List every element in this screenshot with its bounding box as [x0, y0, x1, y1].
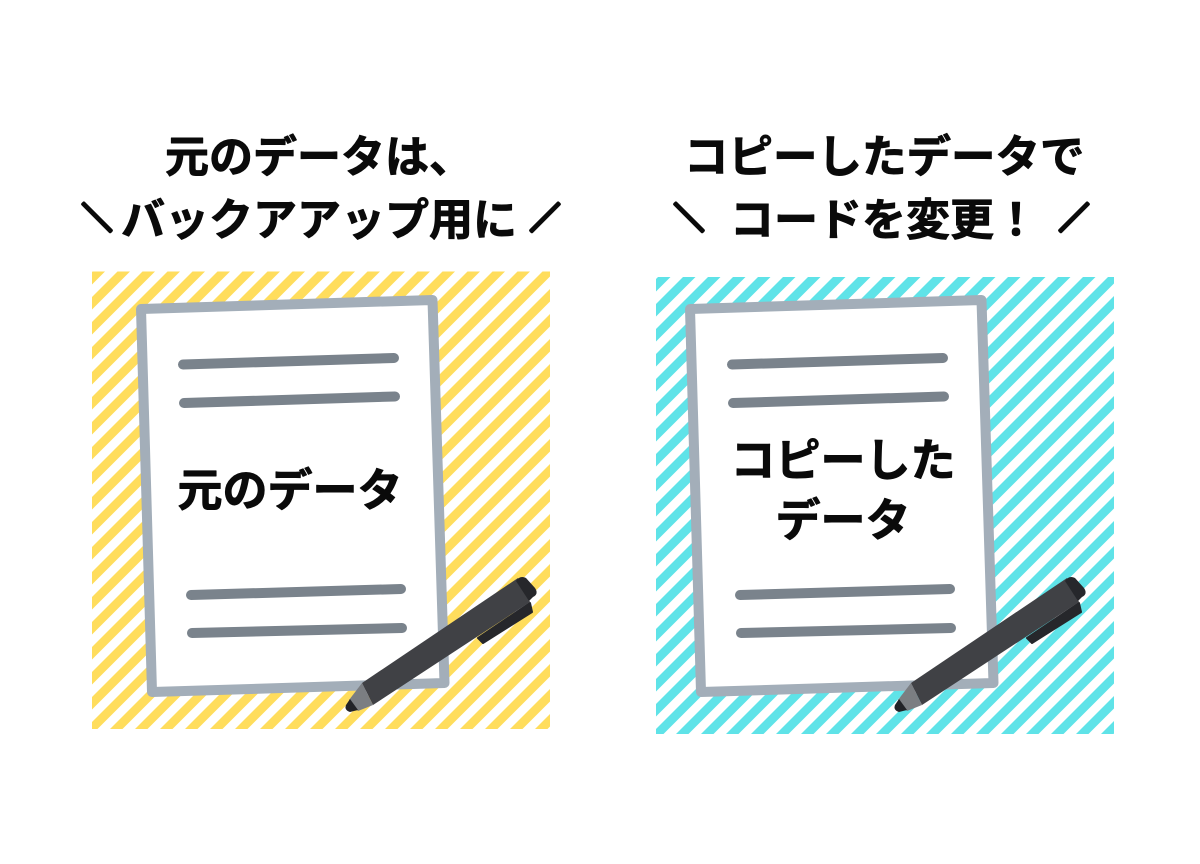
heading: copied data: コピーしたデータで [684, 133, 1085, 182]
panel: original data illustration [92, 272, 550, 729]
heading: copied data: ＼ [674, 203, 704, 236]
yellow striped background [92, 272, 550, 729]
document sheet [690, 300, 994, 692]
heading: original data: ＼ [82, 203, 112, 236]
panel: copied data illustration [656, 277, 1114, 734]
document text lines top [732, 358, 944, 403]
document label: コピーした [730, 435, 956, 486]
heading: copied data [674, 133, 1089, 245]
heading: copied data: コードを変更！ [730, 196, 1038, 245]
document text lines bottom [191, 589, 402, 633]
document label: 元のデータ [177, 465, 403, 516]
document label: データ [775, 495, 911, 546]
heading: copied data: ／ [1059, 203, 1089, 236]
document text lines top [183, 358, 395, 403]
icon: pen [346, 577, 537, 712]
heading: original data [82, 133, 560, 245]
heading: original data: バックアアップ用に [121, 196, 517, 245]
document sheet [141, 300, 444, 692]
heading: original data: 元のデータは、 [165, 133, 473, 182]
icon: pen [894, 577, 1086, 712]
blue striped background [656, 277, 1114, 734]
document label [730, 435, 956, 546]
document text lines bottom [740, 589, 951, 633]
heading: original data: ／ [530, 203, 560, 236]
